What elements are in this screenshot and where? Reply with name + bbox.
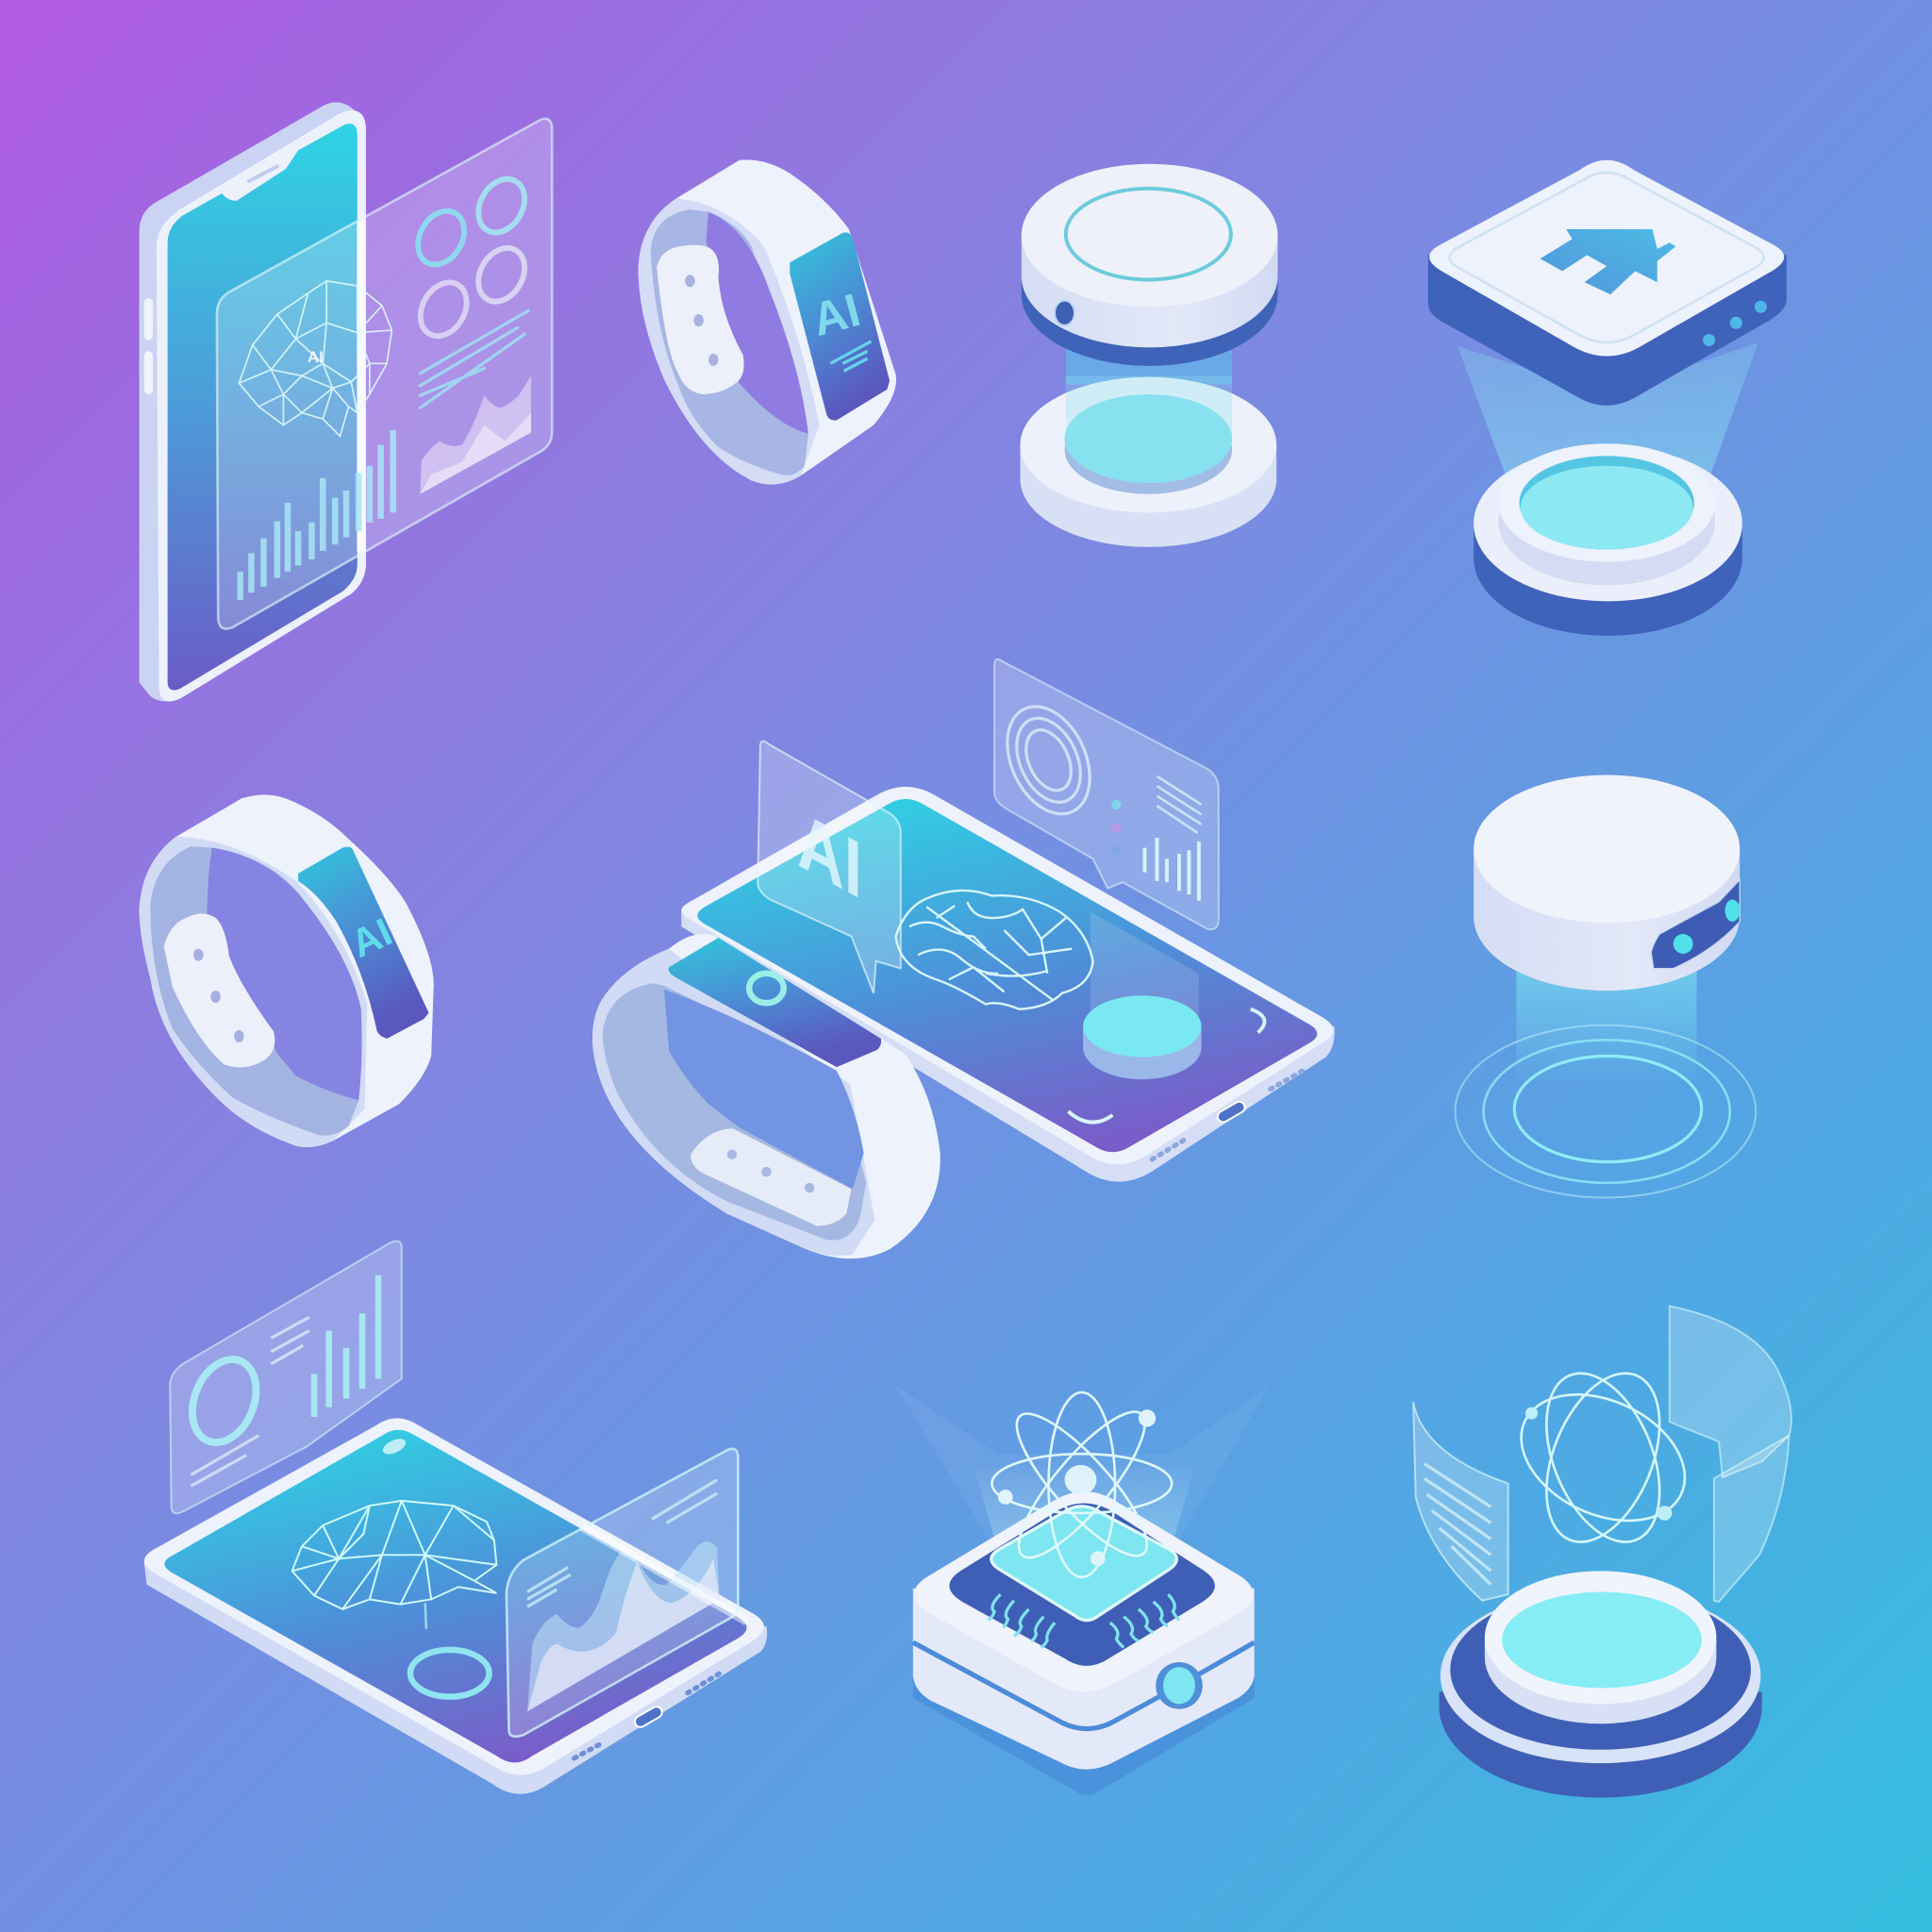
donut: [181, 1350, 268, 1452]
side buttons: [144, 298, 153, 340]
device: cylinder speaker with ripples: [1456, 775, 1756, 1198]
beam: [896, 1386, 1269, 1565]
brain mesh: [239, 281, 391, 436]
AI label: AI: [807, 283, 866, 346]
phone screen: [168, 124, 358, 691]
collar top: [1498, 443, 1715, 562]
glass slab: [217, 119, 552, 629]
puck top: [1022, 164, 1277, 307]
band rim: [592, 949, 874, 1256]
chip body: [913, 1589, 1255, 1770]
house icon: [1541, 229, 1675, 294]
phone side: [681, 909, 1335, 1182]
mini text lines: [1157, 776, 1201, 833]
beam: [1066, 345, 1232, 385]
left curved panel: [1413, 1402, 1508, 1601]
lower disc: [1020, 445, 1276, 547]
chip top: [914, 1491, 1253, 1691]
device: central phone and band: [592, 659, 1335, 1258]
clasp: [657, 245, 744, 394]
ring gauges: [408, 171, 534, 344]
base ring: [1441, 1589, 1760, 1763]
phone frame: [157, 110, 366, 702]
port and grilles: [633, 1705, 664, 1729]
progress ring: [410, 1650, 490, 1697]
camera pill: [380, 1436, 408, 1457]
right lower panel: [1714, 1436, 1789, 1602]
cyan pad: [1502, 1592, 1702, 1688]
band inner surface: [603, 983, 866, 1241]
status ring: [1066, 189, 1231, 279]
AI caption lines: [830, 341, 871, 371]
rim: [639, 198, 820, 485]
band hole: [664, 990, 864, 1189]
atom orbits: [1501, 1357, 1706, 1558]
device: AI chip with atom hologram: [896, 1386, 1269, 1795]
band outer: [592, 934, 941, 1258]
text lines: [191, 1317, 309, 1486]
device: smart band left: [140, 794, 434, 1147]
AI label: AI: [344, 909, 398, 966]
frame seen through glass: [358, 222, 364, 552]
small AI label: AI: [308, 348, 324, 366]
AI panel: [298, 847, 429, 1039]
phone screen: [697, 799, 1317, 1152]
collar side: [1498, 458, 1715, 585]
atom orbits: [991, 1392, 1172, 1577]
right curved panel: [1670, 1306, 1791, 1477]
base top dark: [1450, 1590, 1751, 1750]
device: smart band top: [639, 159, 896, 485]
cyan chip: [991, 1507, 1176, 1621]
clasp: [164, 913, 275, 1067]
device: hologram pedestal with curved panels: [1413, 1306, 1791, 1798]
projection beam: [1091, 912, 1199, 1056]
base dark: [1440, 1691, 1762, 1798]
blue seam: [913, 1642, 1255, 1728]
hub base dark: [1428, 255, 1787, 406]
panel text lines: [527, 1480, 717, 1607]
base white: [1474, 446, 1742, 601]
text lines: [420, 310, 528, 408]
band display: [669, 938, 881, 1067]
AI panel: [790, 232, 890, 421]
indicator dots: [1703, 334, 1715, 346]
bars: [314, 1275, 378, 1417]
rim: [140, 837, 367, 1147]
device: round puck with projection: [1020, 164, 1277, 547]
puck side: [1022, 235, 1277, 347]
device: tablet with panels: [144, 1241, 767, 1794]
nucleus: [1064, 1465, 1096, 1494]
area chart: [527, 1541, 720, 1711]
shadow: [913, 1639, 1255, 1795]
band icon: [749, 974, 784, 1003]
circuit traces: [989, 1594, 1055, 1647]
band outer: [140, 794, 434, 1147]
rear holographic panel: [994, 659, 1219, 929]
tablet top surface: [144, 1418, 764, 1774]
phone top surface: [681, 787, 1333, 1164]
concentric rings: [991, 693, 1106, 827]
tablet side: [144, 1562, 767, 1794]
beam: [1516, 961, 1697, 1082]
orbit nodes: [1525, 1407, 1538, 1420]
line brain: [896, 891, 1093, 1009]
hub top: [1429, 160, 1784, 356]
stem: [425, 1603, 426, 1629]
band hole: [207, 848, 362, 1100]
phone side: [140, 102, 366, 702]
cyan pad: [1519, 456, 1694, 550]
tablet screen: [164, 1430, 747, 1762]
ripple rings: [1456, 1025, 1756, 1198]
device: smart home hub: [1428, 160, 1787, 636]
panel text lines: [1424, 1464, 1491, 1585]
device: smartphone with holographic panel: [140, 102, 552, 702]
sensor strip: [1651, 880, 1740, 969]
dark inset: [949, 1503, 1215, 1666]
lens: [1055, 301, 1074, 325]
band hole: [706, 212, 808, 434]
status port: [1156, 1662, 1203, 1709]
band outer: [639, 159, 896, 485]
bar chart: [241, 430, 393, 600]
band inner surface: [150, 846, 361, 1136]
beam glass over disc: [1066, 375, 1232, 483]
clasp: [691, 1128, 852, 1226]
area chart: [420, 375, 531, 494]
cyan pad: [1064, 406, 1232, 494]
cyan button: [1083, 1026, 1201, 1079]
cylinder top: [1474, 775, 1740, 923]
shadow under puck: [1022, 253, 1277, 366]
band inner surface: [651, 209, 808, 475]
brain mesh: [292, 1501, 496, 1609]
mini bars: [1144, 838, 1199, 901]
glass frame edge: [581, 1526, 747, 1622]
front glass panel: [507, 1449, 738, 1737]
speaker: [249, 166, 277, 181]
AI speech panel: [758, 741, 901, 993]
cylinder side: [1474, 849, 1740, 991]
base dark: [1474, 525, 1742, 636]
AI label: AI: [797, 793, 862, 917]
hologram beam: [1457, 342, 1758, 475]
port and grilles: [1216, 1100, 1247, 1124]
corner glyphs: [1251, 1009, 1264, 1033]
collar top: [1485, 1571, 1716, 1704]
rear panel: [170, 1241, 402, 1513]
collar side: [1485, 1640, 1716, 1724]
